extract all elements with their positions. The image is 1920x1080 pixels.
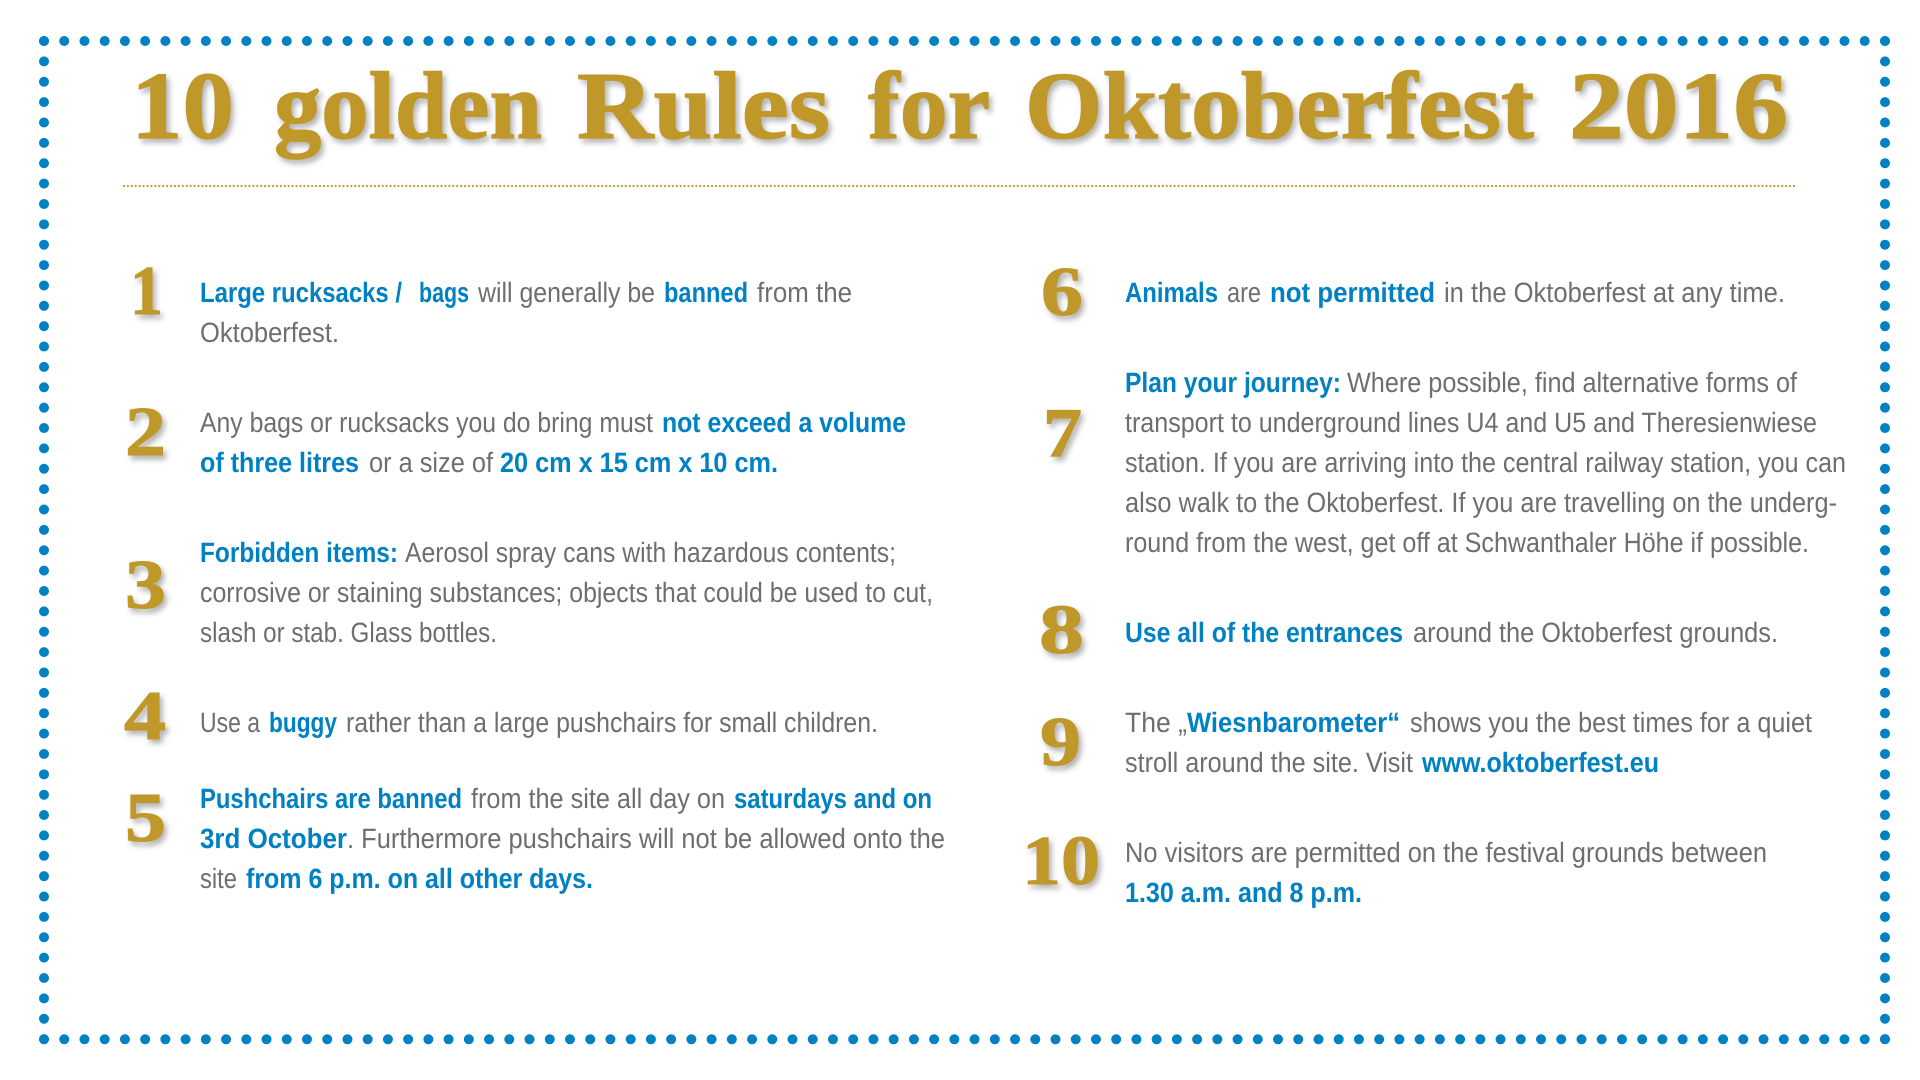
rule 6 [1041,254,1785,331]
rule 2 text: 20 cm x 15 cm x 10 cm. [500,447,778,478]
rule 6 text: are [1227,277,1261,308]
rule 3 text [200,537,933,648]
rule 2 text [200,407,906,478]
rule 9 text: Wiesnbarometer“ [1187,707,1400,738]
rule 4 text: rather than a large pushchairs for small children. [346,707,878,738]
rule 7 text [1125,367,1846,558]
rule 2 [125,394,906,478]
rule 1 text: will generally be [477,277,655,308]
rule 6 text: not permitted [1270,277,1435,308]
rule 8 text: Use all of the entrances [1125,617,1403,648]
title: Rules [577,52,830,159]
number 5: 5 [125,780,166,857]
rule 8 text: around the Oktoberfest grounds. [1413,617,1778,648]
rule 1 [130,253,852,348]
rule 7 text: also walk to the Oktoberfest. If you are travelling on the underg- [1125,487,1837,518]
rule 5 text: site [200,863,237,894]
number 9: 9 [1040,704,1081,781]
rule 4 text: Use a [200,707,260,738]
rule 2 text: or a size of [369,447,493,478]
number 8: 8 [1039,592,1084,669]
rule 1 text: Oktoberfest. [200,317,339,348]
rule 6 text [1125,277,1785,308]
number 7: 7 [1043,395,1082,472]
rule 5 text: from the site all day on [471,783,725,814]
rule 7 [1043,367,1846,558]
title: Oktoberfest [1025,52,1534,159]
title: 10 [131,52,234,159]
number 10: 10 [1022,823,1100,900]
rule 4 [124,678,878,755]
rule 9 text: www.oktoberfest.eu [1421,747,1659,778]
rule 3 text: corrosive or staining substances; objects that could be used to cut, [200,577,933,608]
rule 1 text: banned [664,277,748,308]
rule 10 text: 1.30 a.m. and 8 p.m. [1125,877,1362,908]
title [131,52,1788,160]
rule 1 text: Large rucksacks / [200,277,402,308]
rule 2 text: of three litres [200,447,359,478]
number 3: 3 [125,547,166,624]
rule 5 [125,780,945,894]
rule 2 text: not exceed a volume [662,407,906,438]
rule 1 text [200,277,852,348]
rule 10 text: No visitors are permitted on the festival grounds between [1125,837,1767,868]
rule 2 text: Any bags or rucksacks you do bring must [200,407,653,438]
rule 9 text: The „ [1125,707,1187,738]
number 1: 1 [130,253,163,330]
rule 3 [125,537,933,648]
rule 8 text [1125,617,1778,648]
rule 1 text: from the [757,277,852,308]
rule 5 text: Pushchairs are banned [200,783,462,814]
number 6: 6 [1041,254,1083,331]
rule 7 text: Where possible, find alternative forms of [1347,367,1797,398]
rule 7 text: station. If you are arriving into the central railway station, you can [1125,447,1846,478]
rule 8 [1039,592,1778,669]
rule 9 [1040,704,1812,781]
rule 5 text [200,783,945,894]
rule 1 text: bags [419,277,469,308]
rule 10 [1022,823,1767,908]
rule 7 text: Plan your journey: [1125,367,1341,398]
rule 7 text: transport to underground lines U4 and U5 and Theresienwiese [1125,407,1817,438]
rule 3 text: Forbidden items: [200,537,398,568]
rule 6 text: Animals [1125,277,1218,308]
rule 10 text [1125,837,1767,908]
rule 5 text: . Furthermore pushchairs will not be allowed onto the [347,823,945,854]
title: for [868,52,990,159]
rule 5 text: saturdays and on [734,783,932,814]
number 4: 4 [124,678,166,755]
rule 3 text: Aerosol spray cans with hazardous contents; [405,537,896,568]
rule 6 text: in the Oktoberfest at any time. [1444,277,1785,308]
rule 5 text: from 6 p.m. on all other days. [246,863,593,894]
rule 3 text: slash or stab. Glass bottles. [200,617,497,648]
rule 5 text: 3rd October [200,823,347,854]
rule 9 text: stroll around the site. Visit [1125,747,1413,778]
title underline: dotted gold rule [124,185,1796,187]
rule 4 text: buggy [269,707,337,738]
title: 2016 [1569,52,1788,159]
rule 7 text: round from the west, get off at Schwanthaler Höhe if possible. [1125,527,1809,558]
number 2: 2 [125,394,166,471]
title: golden [274,52,542,160]
rule 9 text [1125,707,1812,778]
rule 9 text: shows you the best times for a quiet [1410,707,1812,738]
